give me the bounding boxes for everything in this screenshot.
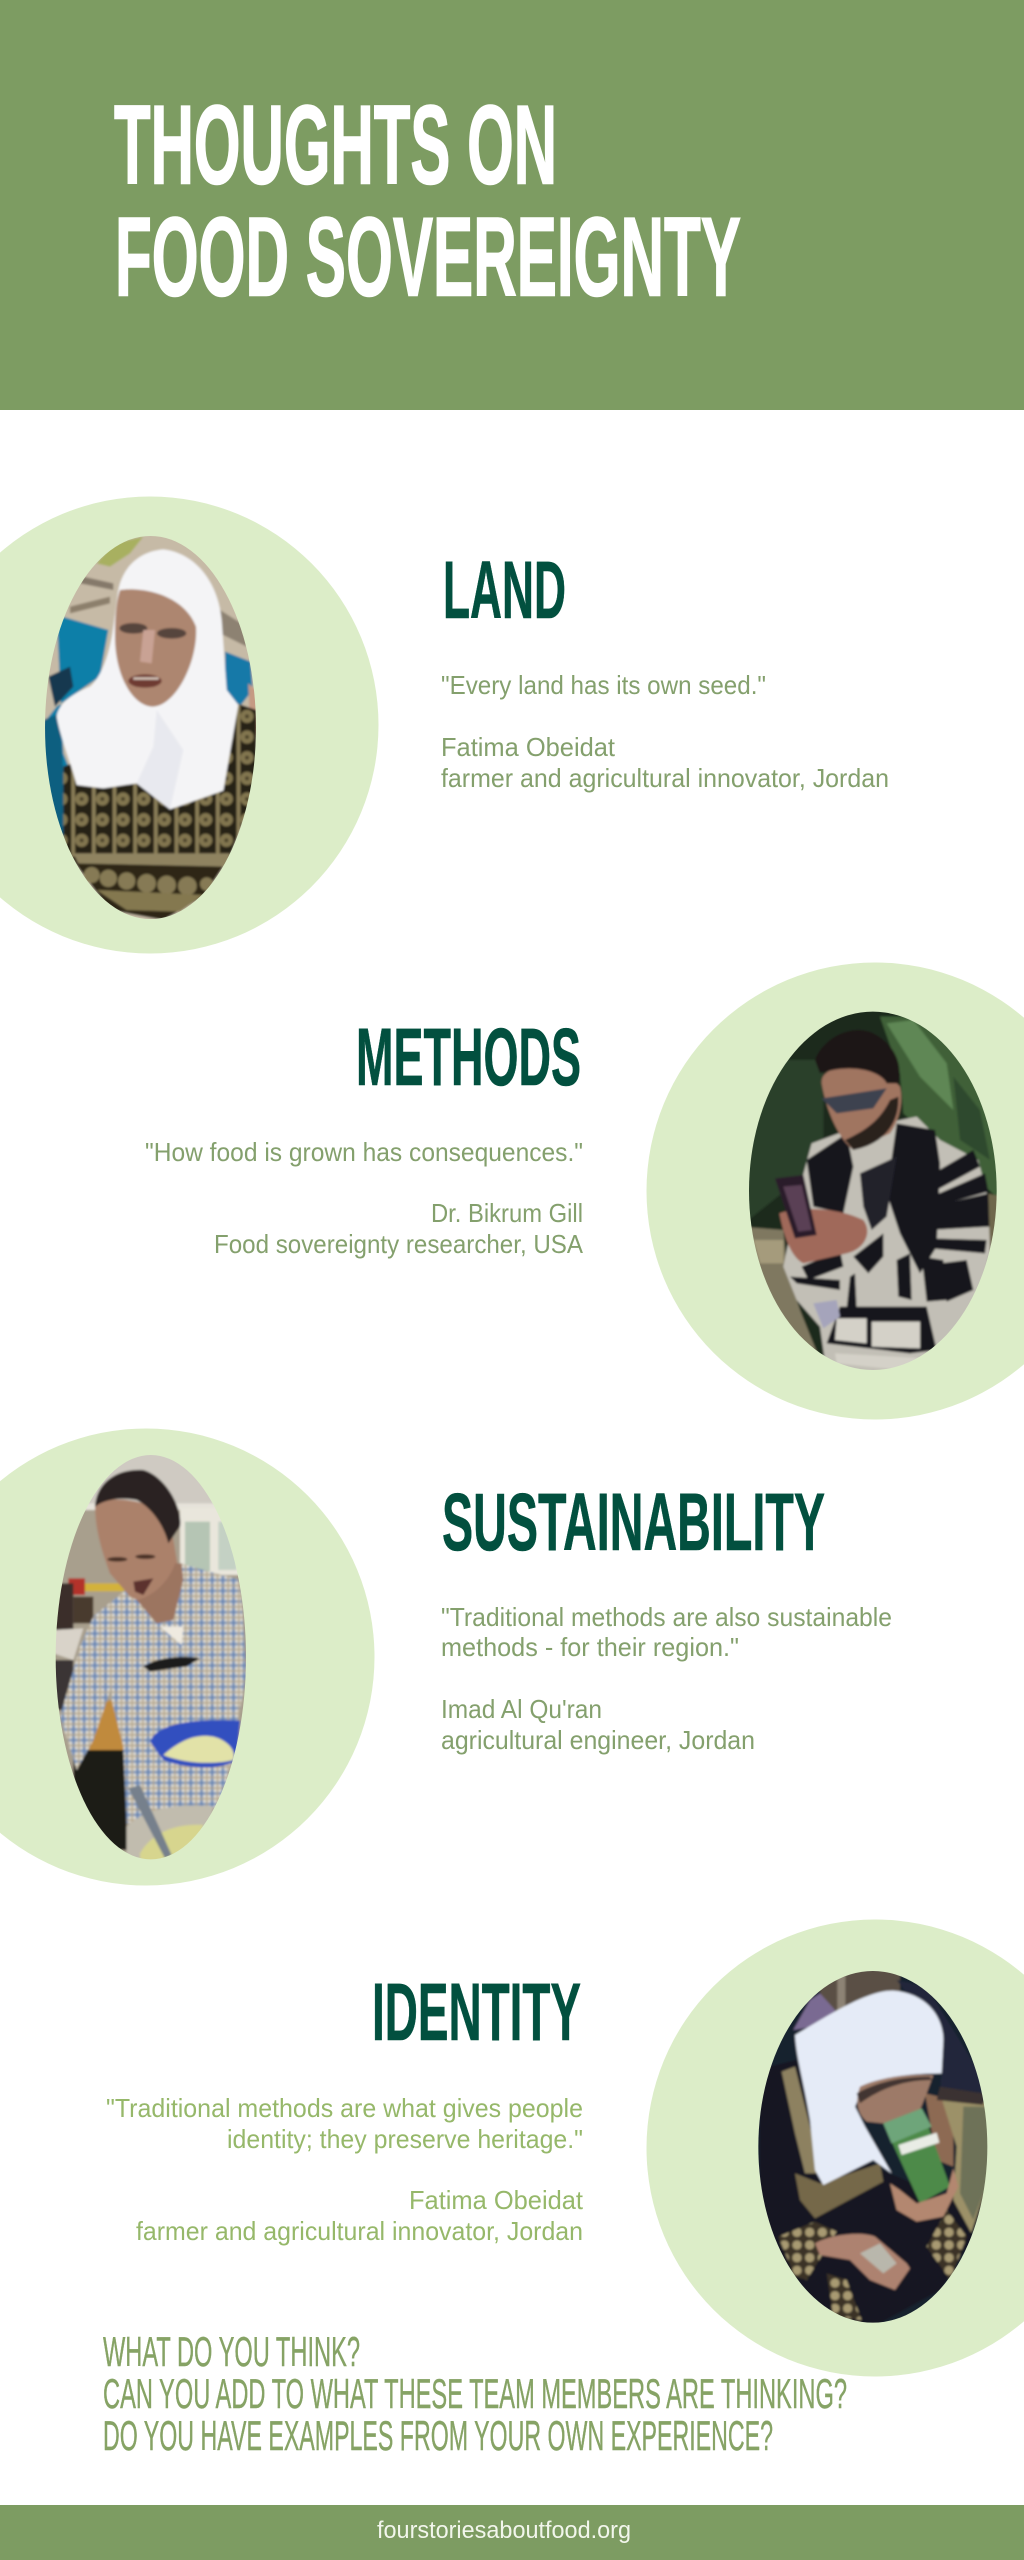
attribution: land: Fatima Obeidat bbox=[441, 732, 616, 762]
title: THOUGHTS ON bbox=[114, 82, 557, 208]
quote: sustainability: methods - for their region." bbox=[441, 1632, 739, 1662]
footer website: fourstoriesaboutfood.org bbox=[377, 2517, 631, 2544]
quote: methods: "How food is grown has consequences." bbox=[145, 1137, 583, 1167]
attribution: sustainability bbox=[441, 1694, 755, 1755]
quote: sustainability bbox=[441, 1602, 892, 1662]
quote: land: "Every land has its own seed." bbox=[441, 670, 766, 700]
attribution: land: farmer and agricultural innovator, Jordan bbox=[441, 763, 889, 793]
heading: land: LAND bbox=[443, 545, 566, 636]
attribution: sustainability: agricultural engineer, Jordan bbox=[441, 1725, 755, 1755]
identity background circle bbox=[646, 1920, 1024, 2376]
heading: methods: METHODS bbox=[356, 1012, 581, 1103]
attribution: methods: Food sovereignty researcher, USA bbox=[214, 1229, 584, 1259]
photo: Fatima Obeidat with seed jar bbox=[758, 1971, 988, 2323]
title bbox=[114, 82, 741, 320]
quote: identity: "Traditional methods are what gives people bbox=[106, 2093, 583, 2123]
heading: identity: IDENTITY bbox=[372, 1967, 581, 2058]
closing questions bbox=[103, 2328, 847, 2459]
quote: identity: identity; they preserve heritage." bbox=[227, 2124, 583, 2154]
panel: identity bbox=[106, 1920, 1024, 2376]
attribution: sustainability: Imad Al Qu'ran bbox=[441, 1694, 602, 1724]
panel: sustainability bbox=[0, 1428, 892, 1886]
panel: land bbox=[0, 496, 889, 954]
photo: Fatima Obeidat portrait bbox=[45, 536, 256, 919]
attribution: methods: Dr. Bikrum Gill bbox=[431, 1198, 583, 1228]
attribution: methods bbox=[214, 1198, 584, 1259]
header banner bbox=[0, 0, 1024, 410]
land background circle bbox=[0, 496, 378, 954]
sustainability background circle bbox=[0, 1428, 374, 1886]
quote: sustainability: "Traditional methods are also sustainable bbox=[441, 1602, 892, 1632]
photo: Dr. Bikrum Gill portrait bbox=[749, 1012, 997, 1370]
attribution: identity: Fatima Obeidat bbox=[409, 2185, 584, 2215]
closing questions: WHAT DO YOU THINK? bbox=[103, 2328, 360, 2375]
panel: methods bbox=[145, 962, 1024, 1420]
attribution: identity bbox=[136, 2185, 584, 2246]
methods background circle bbox=[646, 962, 1024, 1420]
footer bar bbox=[0, 2505, 1024, 2560]
photo: Imad Al Qu'ran portrait bbox=[56, 1455, 246, 1860]
attribution: land bbox=[441, 732, 889, 793]
quote: identity bbox=[106, 2093, 583, 2154]
attribution: identity: farmer and agricultural innovator, Jordan bbox=[136, 2216, 583, 2246]
